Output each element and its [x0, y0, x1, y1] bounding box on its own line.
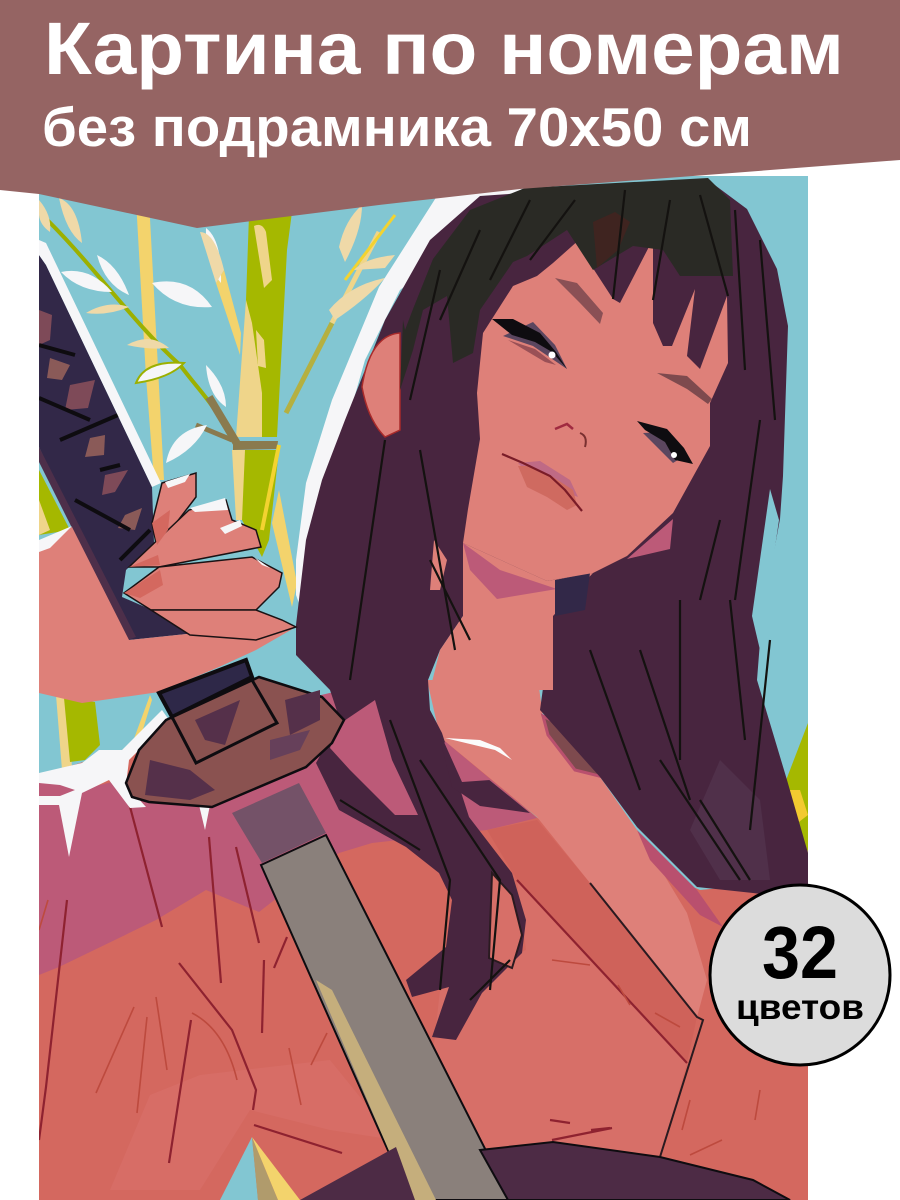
black hair top: [400, 178, 733, 390]
header banner: [0, 0, 900, 228]
pink patch in snow: [39, 783, 75, 796]
hair strand lines: [340, 190, 775, 1000]
nose: [555, 424, 586, 447]
pink strip under lock: [444, 742, 490, 782]
hair lower lighter sheen: [690, 760, 770, 880]
sword handle: [39, 255, 196, 640]
right hair sky sliver: [752, 489, 779, 650]
hair small lock over collar: [446, 748, 530, 813]
sword blade base: [232, 783, 326, 863]
sky background: [39, 176, 808, 890]
kimono pink shading: [39, 683, 537, 975]
white edge of handle: [39, 240, 161, 487]
skin oval between strands: [430, 540, 447, 590]
white guard arc and snow: [39, 710, 169, 857]
bamboo stalks: [39, 200, 808, 885]
brown hair patch: [593, 212, 630, 268]
finger three: [124, 557, 282, 610]
yellow stalk at hem: [252, 1137, 300, 1200]
small sky gap at kimono hem: [220, 1137, 258, 1200]
right eyebrow: [657, 373, 712, 404]
collar shadow band: [589, 882, 590, 883]
snow accent: [199, 805, 210, 830]
white hair highlight: [296, 186, 525, 620]
brown shoulder shadow: [543, 716, 603, 777]
ear: [362, 333, 400, 437]
kimono base: [39, 700, 808, 1200]
badge: number of colours: [710, 885, 890, 1065]
tsuba sword guard: [126, 677, 344, 807]
face: [463, 239, 728, 581]
title: Картина по номерам: [44, 7, 844, 90]
collar dark line: [590, 883, 703, 1157]
left eyebrow: [555, 278, 603, 324]
right eye: [637, 421, 693, 464]
hair tendril loop: [489, 873, 522, 968]
handle strap: [39, 447, 136, 640]
fingertip highlights: [165, 474, 270, 568]
finger two: [129, 500, 261, 567]
nail shading: [124, 510, 170, 598]
kimono fold lines: [39, 803, 687, 1163]
obi sash right part: [480, 1142, 790, 1200]
handle black binding: [39, 345, 150, 560]
neck skin: [430, 543, 593, 690]
kimono light fold lines: [39, 900, 760, 1155]
tan stalk at hem: [252, 1137, 278, 1200]
arm and palm: [39, 527, 296, 703]
thumb finger: [152, 473, 196, 548]
kimono lighter mottling: [110, 1060, 395, 1190]
sword blade: [261, 835, 511, 1200]
pink kimono showing between hair strands: [330, 700, 418, 815]
badge number: 32: [762, 911, 838, 994]
chest skin: [427, 680, 707, 1017]
obi sash left part: [300, 1147, 415, 1200]
handle wrap diamonds: [39, 310, 142, 530]
badge label: цветов: [736, 988, 864, 1027]
finger four: [151, 610, 296, 640]
neck shadow: [463, 543, 557, 599]
collar white highlight: [445, 738, 512, 760]
brown collar: [172, 680, 277, 763]
hand fingers: [124, 473, 296, 640]
pink skin shadow beside right hair: [637, 830, 723, 927]
bamboo leaves: [39, 198, 395, 463]
lips: [502, 454, 582, 511]
blade edge: [316, 980, 436, 1200]
pink patch under jaw: [627, 519, 673, 559]
lower breast: [433, 880, 687, 1157]
subtitle: без подрамника 70х50 см: [42, 96, 752, 158]
painting illustration: [39, 176, 808, 1200]
bamboo branches: [39, 212, 395, 530]
left eye: [492, 319, 567, 369]
arm white highlight: [39, 526, 72, 552]
navy shadow under chin: [555, 573, 590, 616]
long dark purple hair: [296, 180, 808, 1040]
navy collar band: [159, 660, 252, 717]
